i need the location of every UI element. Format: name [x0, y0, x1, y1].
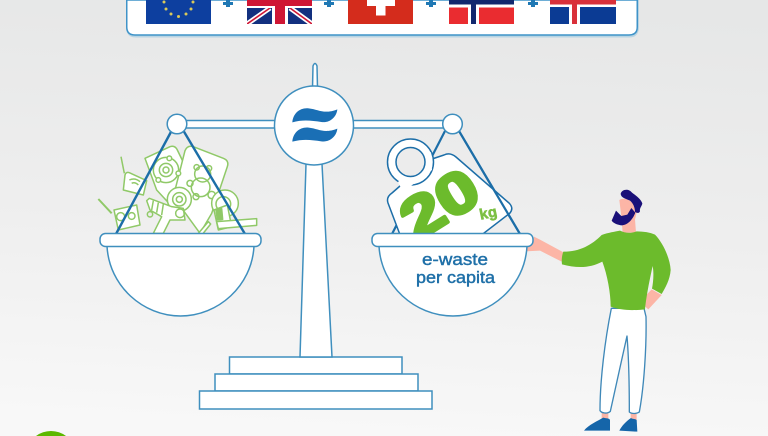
neck and face — [619, 199, 637, 233]
pan label: e-waste — [422, 251, 488, 269]
gear top — [153, 156, 181, 183]
left pan strings — [116, 130, 245, 234]
hip hand — [643, 289, 662, 309]
antenna device — [98, 199, 112, 213]
router — [121, 157, 124, 173]
pan label: per capita — [416, 269, 496, 287]
right pan — [372, 234, 533, 316]
flag: Switzerland — [348, 0, 413, 24]
column — [300, 164, 332, 357]
plus sign — [426, 0, 436, 7]
base steps — [200, 357, 432, 409]
flag: United Kingdom — [247, 0, 312, 24]
left pan — [100, 234, 261, 316]
gear mid — [167, 187, 191, 211]
kettlebell weight — [386, 138, 513, 233]
teddy bear — [187, 165, 215, 200]
top spike — [312, 64, 318, 88]
pivot circle with logo — [274, 86, 354, 165]
panel: flags — [127, 0, 638, 36]
weight value: 20 — [388, 155, 491, 253]
disc — [212, 190, 238, 217]
icon: green circle, bottom left — [36, 431, 66, 436]
tool — [214, 205, 232, 230]
left pan contents: e-waste — [98, 146, 257, 234]
hair — [621, 190, 642, 213]
right string over weight — [459, 131, 520, 234]
beard — [612, 208, 635, 225]
beam — [180, 120, 450, 128]
ankles — [602, 412, 637, 420]
scale — [180, 64, 450, 409]
camera or drill — [147, 198, 185, 233]
plus sign — [324, 0, 334, 7]
flag: European Union — [146, 0, 211, 24]
shoes — [584, 418, 637, 432]
plus sign — [528, 0, 538, 7]
flag: Iceland — [550, 0, 616, 24]
flag: Norway — [449, 0, 514, 24]
trousers — [600, 308, 646, 413]
icon: waves logo — [292, 108, 337, 142]
tablet — [145, 146, 200, 213]
plus sign — [223, 0, 233, 7]
right pan strings — [392, 131, 520, 234]
shirt — [562, 231, 671, 310]
tablet with teddy — [173, 146, 228, 233]
left pan ball — [167, 114, 187, 134]
hand and arm — [520, 237, 564, 262]
pan label — [416, 251, 496, 287]
person — [520, 190, 671, 432]
weight unit: kg — [478, 203, 499, 224]
right pan ball — [443, 114, 462, 134]
